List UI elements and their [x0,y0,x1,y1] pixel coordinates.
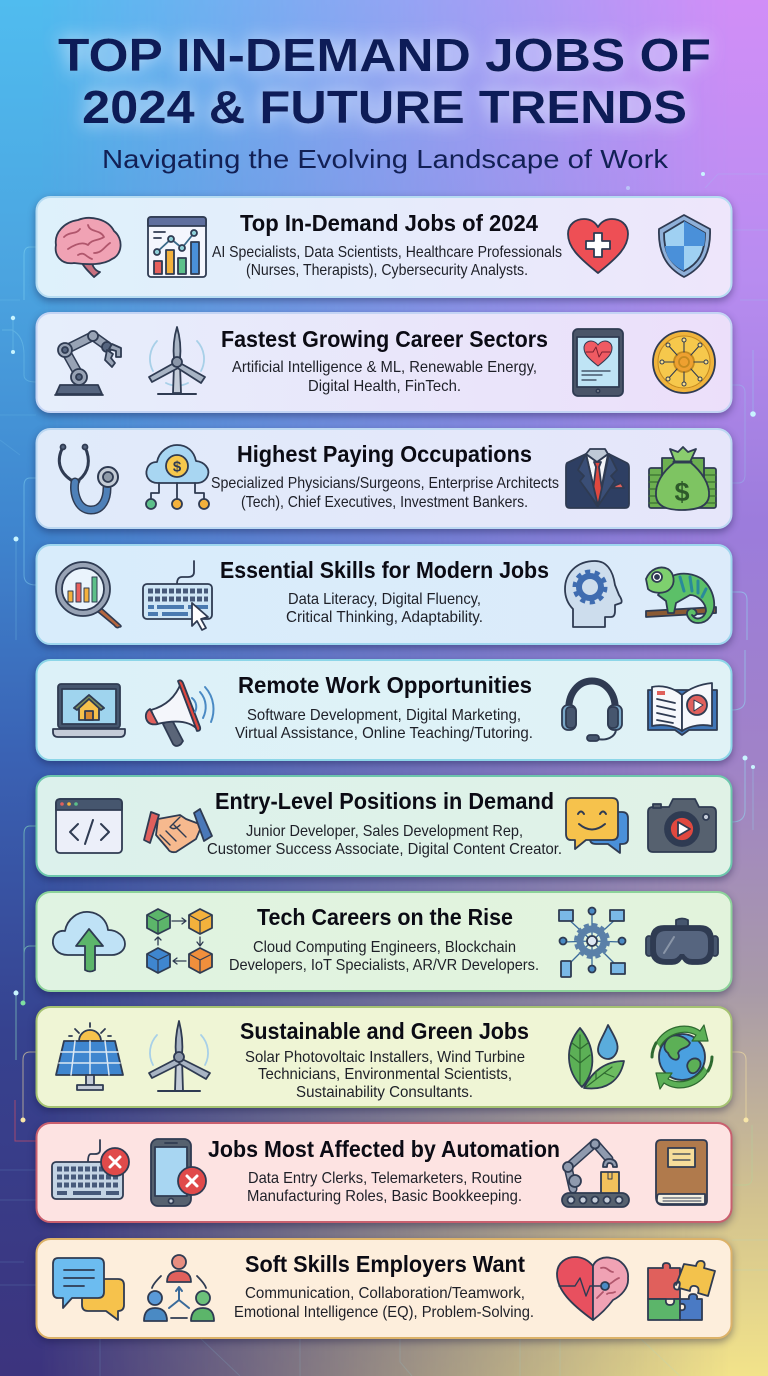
description: Specialized Physicians/Surgeons, Enterprise Architects [211,475,559,492]
icon: headset [562,681,622,741]
panel: Tech Careers on the Rise [36,892,732,991]
description: Digital Health, FinTech. [308,378,461,395]
icon: health tablet [573,329,623,396]
icon: smiling chat bubbles [566,798,628,853]
icon: closed book [656,1140,707,1205]
description: Manufacturing Roles, Basic Bookkeeping. [247,1188,522,1205]
panel: Remote Work Opportunities [36,660,732,760]
icon: laptop with home [53,684,125,737]
description [234,1285,534,1321]
icon: chameleon [646,567,716,623]
heading: Top In-Demand Jobs of 2024 [240,210,538,236]
heading: Soft Skills Employers Want [245,1251,525,1277]
icon: business suit [566,449,629,508]
description [212,244,562,279]
description: (Nurses, Therapists), Cybersecurity Analysts. [246,262,528,279]
description: (Tech), Chief Executives, Investment Bankers. [241,494,528,511]
panel: Sustainable and Green Jobs [36,1007,732,1107]
icon: shield [659,215,710,277]
icon: video camera [648,799,716,852]
description [286,591,483,626]
description: Technicians, Environmental Scientists, [258,1066,512,1083]
description: Critical Thinking, Adaptability. [286,609,483,626]
description: Solar Photovoltaic Installers, Wind Turbine [245,1049,525,1066]
description: Emotional Intelligence (EQ), Problem-Solving. [234,1304,534,1321]
panel: Top In-Demand Jobs of 2024 [36,197,732,297]
description: Virtual Assistance, Online Teaching/Tutoring. [235,725,533,742]
icon: code window [56,799,122,853]
icon: recycling globe [652,1025,712,1089]
icon: keyboard with cursor [143,561,212,630]
icon: cloud upload [53,912,125,972]
description [211,475,559,511]
icon: open book with video [648,683,717,735]
description: Artificial Intelligence & ML, Renewable Energy, [232,359,537,376]
icon: solar panel [56,1023,123,1090]
description: Software Development, Digital Marketing, [247,707,521,724]
icon: leaves and water drop [569,1025,624,1089]
icon: VR headset [646,918,718,964]
icon: team collaboration [144,1255,214,1321]
icon: cloud finance network: $ [173,458,182,476]
description: Sustainability Consultants. [296,1084,473,1101]
icon: heart with medical cross [568,219,628,273]
description: Data Entry Clerks, Telemarketers, Routine [248,1170,522,1187]
icon: head with gear [565,561,622,627]
description: Cloud Computing Engineers, Blockchain [253,939,516,956]
icon: magnifying glass [56,562,121,628]
panel: Soft Skills Employers Want [36,1239,732,1338]
description [207,823,562,858]
title: TOP IN-DEMAND JOBS OF [58,29,711,81]
description: Developers, IoT Specialists, AR/VR Developers. [229,957,539,974]
icon: phone with error mark [151,1139,206,1206]
heading: Remote Work Opportunities [238,672,532,698]
icon: cloud finance network [146,445,209,509]
icon: puzzle pieces [648,1261,715,1320]
description: Junior Developer, Sales Development Rep, [246,823,523,840]
description: Data Literacy, Digital Fluency, [288,591,481,608]
description [235,707,533,742]
heading: Tech Careers on the Rise [257,904,513,930]
heading: Fastest Growing Career Sectors [221,326,548,352]
heading: Highest Paying Occupations [237,441,532,467]
icon: wind turbine [149,327,205,394]
panel: Essential Skills for Modern Jobs [36,545,732,644]
title [58,29,711,133]
subtitle: Navigating the Evolving Landscape of Work [102,144,669,174]
heading: Sustainable and Green Jobs [240,1018,529,1044]
icon: wind turbine [149,1021,210,1091]
icon: handshake [144,809,212,852]
icon: keyboard with error mark [52,1140,129,1199]
heading: Jobs Most Affected by Automation [208,1136,560,1162]
icon: network gear [559,908,626,977]
description [232,359,537,395]
heading: Entry-Level Positions in Demand [215,788,554,814]
icon: heart and brain [557,1257,628,1320]
panel: Entry-Level Positions in Demand [36,776,732,876]
description: Communication, Collaboration/Teamwork, [245,1285,525,1302]
icon: megaphone [146,680,213,746]
icon: analytics dashboard [148,217,206,277]
heading: Essential Skills for Modern Jobs [220,557,549,583]
panel: Jobs Most Affected by Automation [36,1123,732,1222]
icon: blockchain cubes [147,909,212,973]
panel: Fastest Growing Career Sectors [36,313,732,412]
icon: robot arm [55,331,121,395]
description [245,1049,525,1101]
icon: stethoscope [59,444,118,510]
description [247,1170,522,1205]
description: AI Specialists, Data Scientists, Healthcare Professionals [212,244,562,261]
circuit node dots [11,172,756,1122]
panel: Highest Paying Occupations [36,429,732,528]
icon: chat bubbles [53,1258,124,1320]
icon: robot on conveyor [562,1140,629,1207]
title: 2024 & FUTURE TRENDS [82,81,687,133]
icon: money bag with cash [649,447,716,510]
description: Customer Success Associate, Digital Content Creator. [207,841,562,858]
icon: money bag with cash: $ [674,477,690,507]
icon: brain [56,218,121,277]
description [229,939,539,974]
icon: gold digital coin [653,331,715,393]
